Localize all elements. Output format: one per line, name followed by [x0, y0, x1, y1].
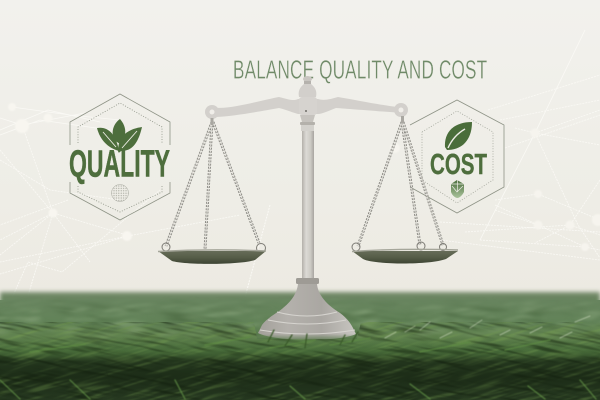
network nodes: left	[8, 103, 132, 241]
beam	[213, 97, 403, 117]
finial	[299, 76, 317, 131]
left chains	[162, 122, 266, 252]
right chains	[352, 122, 446, 251]
grass: foreground	[0, 316, 600, 400]
left pan	[158, 250, 266, 264]
icon: crest	[449, 180, 466, 198]
icon: leaf	[445, 122, 472, 150]
badge: cost	[410, 100, 504, 213]
hexagon outline	[410, 100, 504, 213]
post	[302, 128, 314, 280]
base	[258, 278, 356, 340]
beam end rings	[205, 103, 408, 125]
grass: back field	[0, 289, 600, 342]
network nodes: right	[390, 128, 600, 251]
network lines: left	[0, 107, 270, 334]
title: BALANCE QUALITY AND COST	[233, 55, 487, 84]
label: quality: QUALITY	[69, 144, 170, 186]
right pan	[352, 249, 458, 264]
hexagon outline	[70, 94, 170, 220]
individual blades	[0, 316, 596, 399]
label: cost: COST	[430, 149, 487, 181]
foreground blade texture	[0, 322, 600, 400]
icon: leaves	[97, 119, 142, 153]
scale	[158, 76, 458, 340]
network lines: right	[440, 30, 600, 260]
badge: quality	[69, 94, 170, 220]
icon: textured ball	[112, 184, 128, 202]
foreground fill covering the scale base	[0, 330, 600, 400]
